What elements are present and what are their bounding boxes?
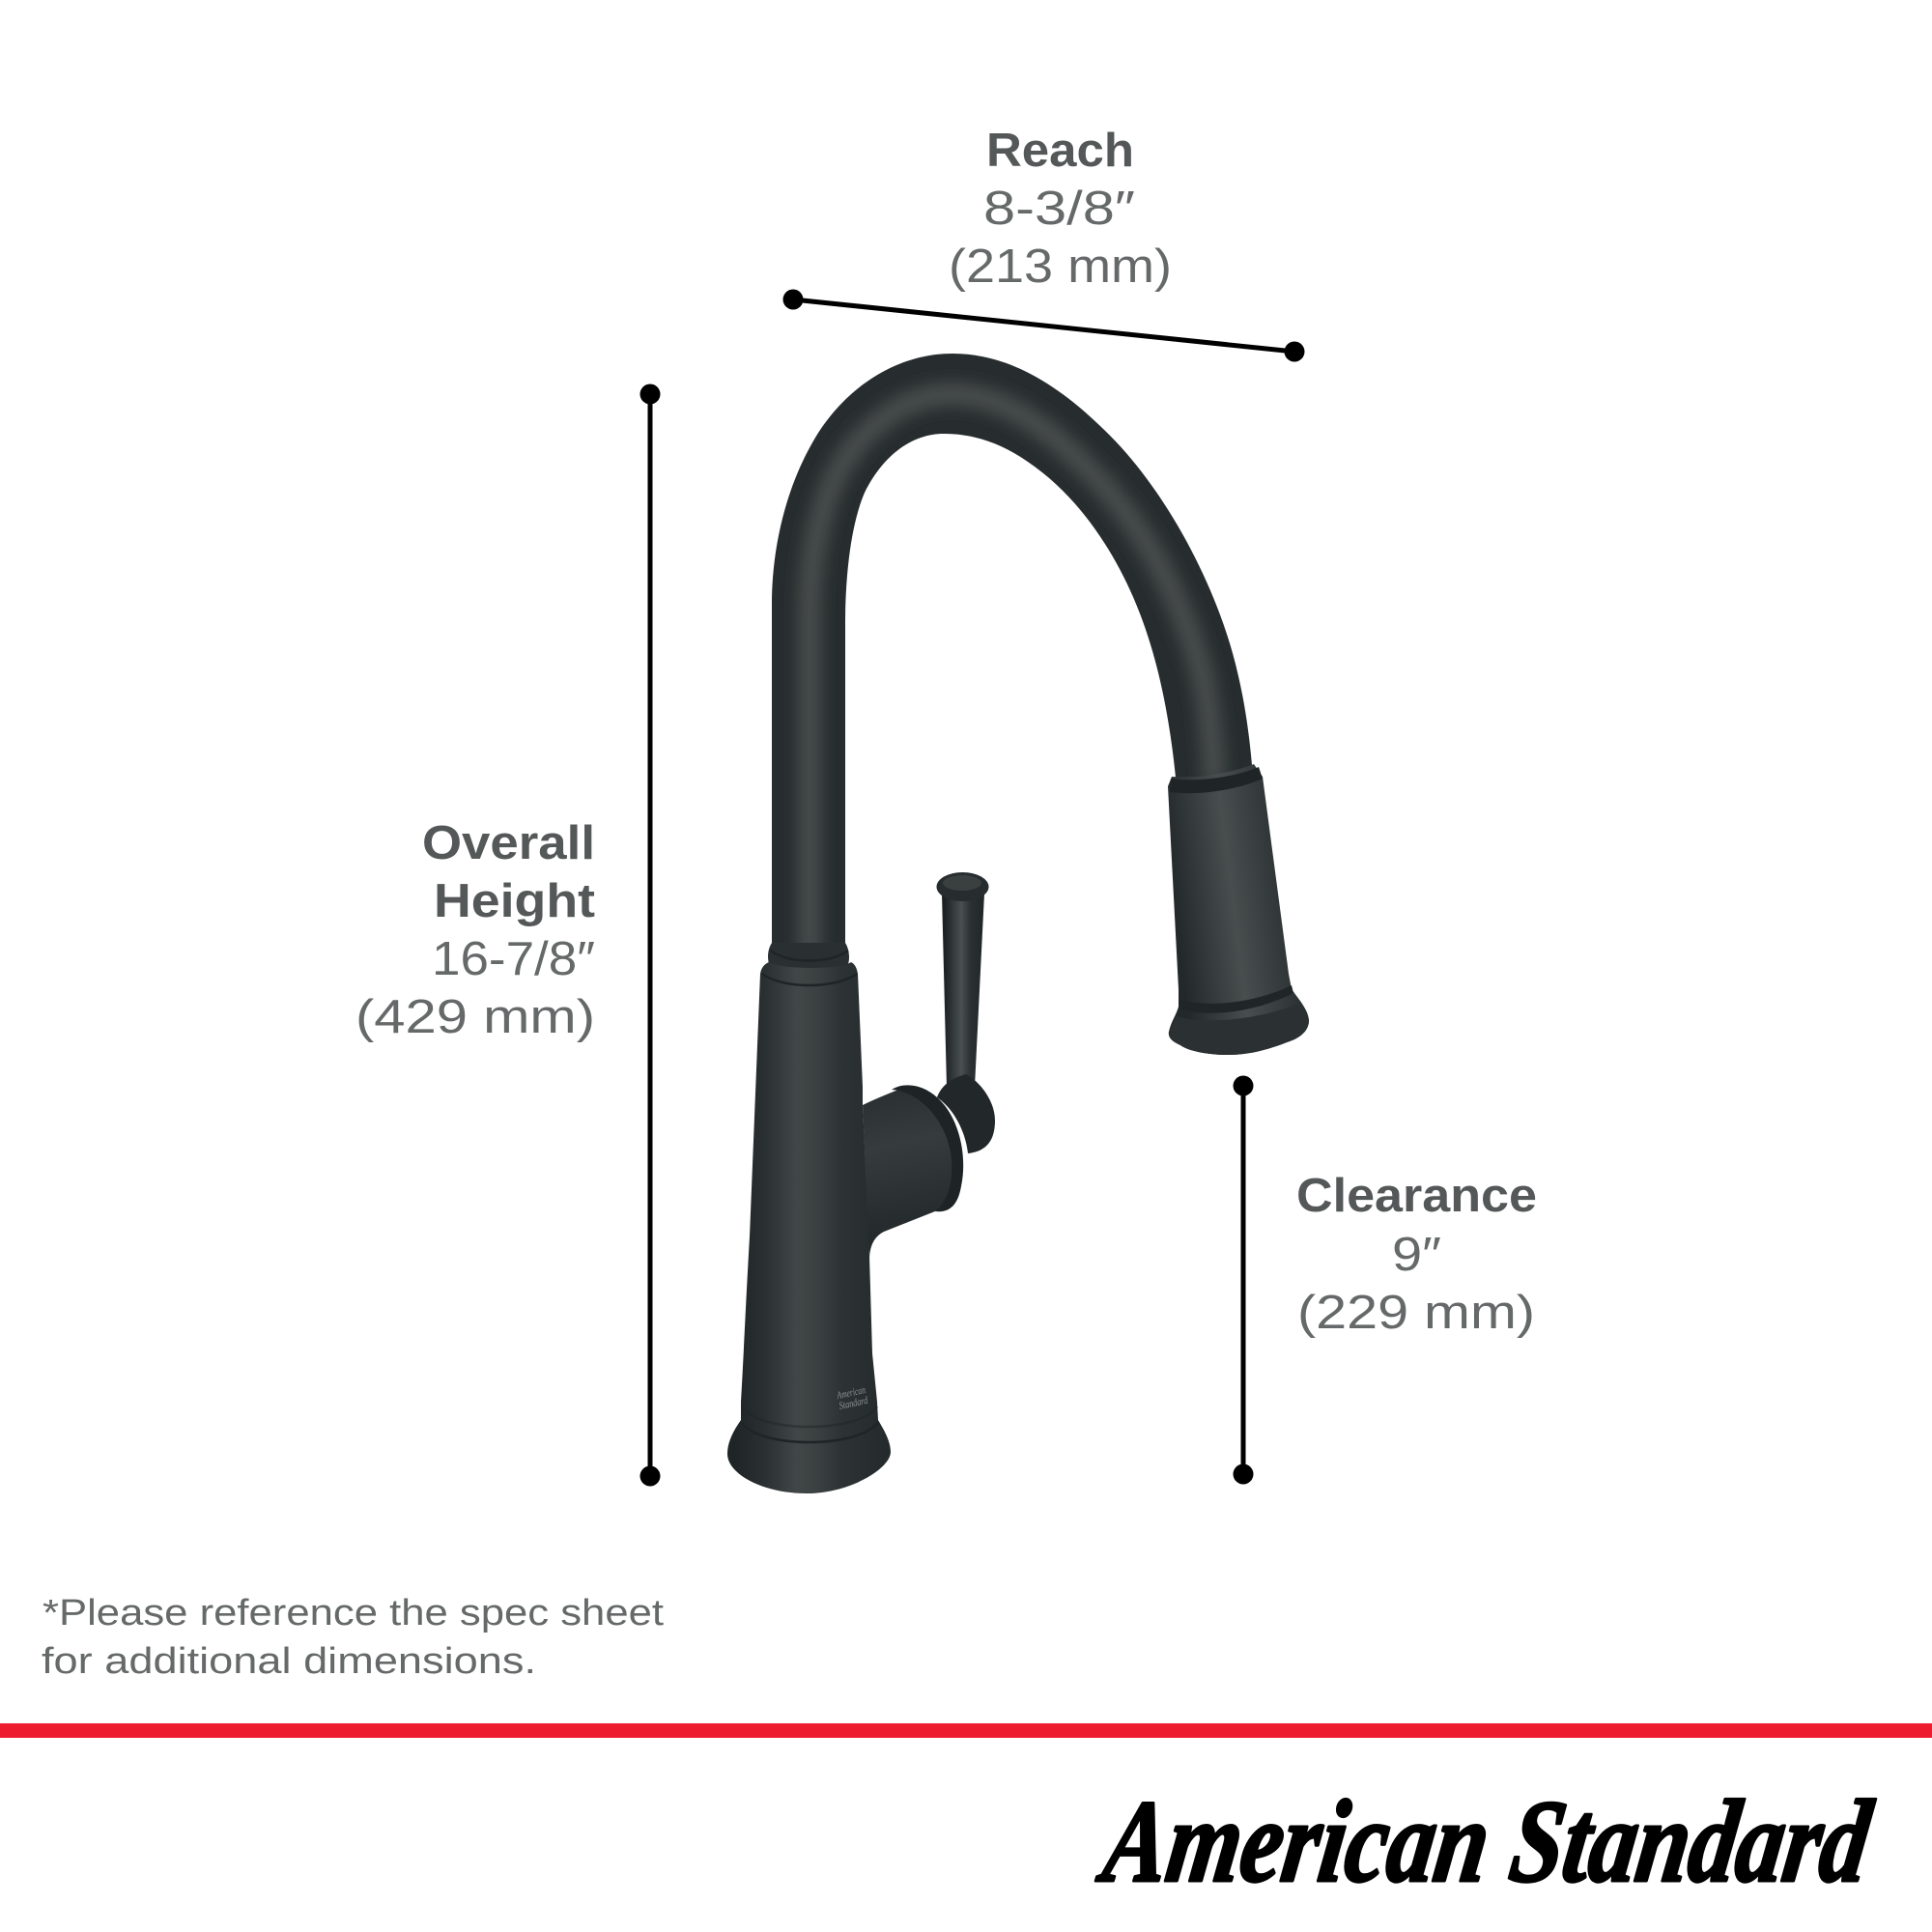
reach label: 8-3/8″ [983,183,1135,235]
engraved mini logo: American [836,1384,867,1402]
engraved mini logo [836,1384,869,1412]
clearance label [1296,1170,1537,1339]
overall height dimension line [639,384,661,1486]
faucet body [727,962,891,1493]
clearance label: (229 mm) [1297,1287,1535,1339]
red divider bar [0,1723,1932,1738]
clearance label: 9″ [1392,1229,1441,1281]
footnote [42,1593,665,1682]
reach label [949,125,1172,293]
base ring lines [741,951,878,1442]
overall height label: 16-7/8″ [432,933,595,985]
reach label: Reach [986,125,1134,177]
clearance label: Clearance [1296,1170,1537,1222]
overall height label: Overall [422,817,595,869]
overall height label [355,817,595,1043]
overall height label: Height [434,875,595,927]
reach dimension line [782,290,1304,361]
gooseneck spout [772,354,1254,966]
overall height label: (429 mm) [355,991,595,1043]
engraved mini logo: Standard [838,1395,869,1412]
footnote: for additional dimensions. [42,1641,536,1682]
faucet illustration [727,354,1309,1493]
footnote: *Please reference the spec sheet [43,1593,665,1634]
lever handle [937,872,995,1153]
neck collar [761,943,856,972]
pull-down spray head [1168,764,1309,1055]
side arm and flange [863,1085,963,1261]
reach label: (213 mm) [949,241,1172,293]
clearance dimension line [1233,1076,1254,1484]
